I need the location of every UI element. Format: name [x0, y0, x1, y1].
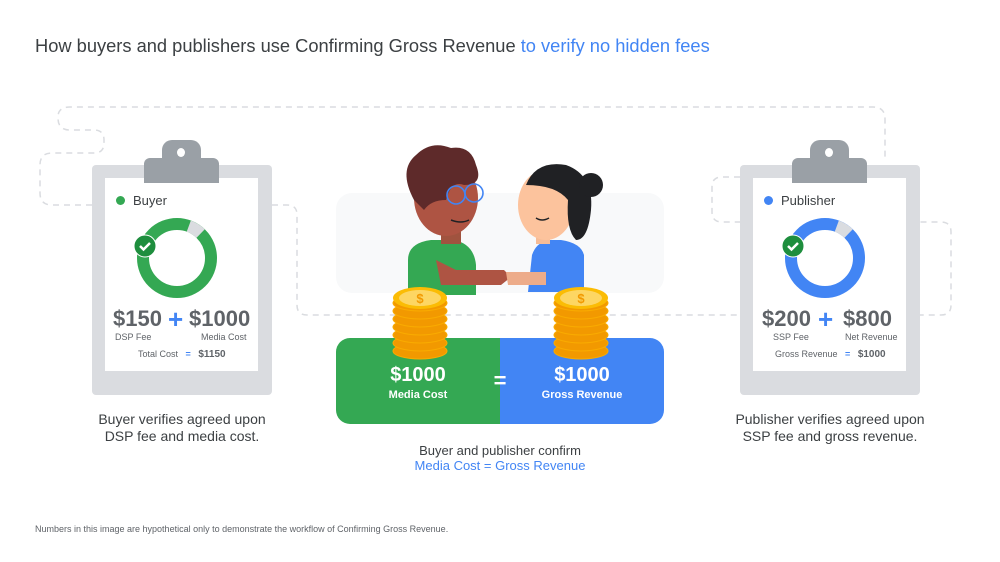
icon: coin stack left: $	[416, 291, 424, 306]
caption: center: Media Cost = Gross Revenue	[415, 458, 585, 473]
equation: DSP Fee	[115, 332, 151, 342]
donut chart	[785, 218, 865, 298]
icon: coin stack right	[554, 287, 608, 360]
caption: buyer	[98, 411, 266, 444]
equation: Net Revenue	[845, 332, 898, 342]
bar: media cost = gross revenue: Media Cost	[389, 389, 447, 401]
caption: publisher: SSP fee and gross revenue.	[743, 428, 917, 444]
bar: media cost = gross revenue: $1000	[390, 364, 446, 386]
equation: Total Cost = $1150	[138, 349, 226, 360]
caption: publisher	[735, 411, 925, 444]
caption: buyer: Buyer verifies agreed upon	[98, 411, 266, 427]
caption: buyer: DSP fee and media cost.	[105, 428, 259, 444]
donut chart	[137, 218, 217, 298]
bar: media cost = gross revenue: =	[494, 368, 506, 393]
caption: publisher: Publisher verifies agreed upon	[735, 411, 925, 427]
bar: media cost = gross revenue	[336, 338, 664, 424]
publisher person	[506, 164, 603, 292]
equation: Gross Revenue = $1000	[775, 349, 886, 360]
equation: +	[168, 304, 183, 334]
equation: $200	[762, 306, 811, 331]
footnote: Numbers in this image are hypothetical only to demonstrate the workflow of Confirming Gross Revenue.	[35, 524, 448, 534]
equation: $800	[843, 306, 892, 331]
illustration: handshake people	[406, 145, 603, 295]
icon: clip	[792, 140, 867, 183]
equation: +	[818, 304, 833, 334]
equation: Media Cost	[201, 332, 247, 342]
legend: buyer	[116, 193, 167, 208]
icon: coin stack right: $	[577, 291, 585, 306]
equation: $1000	[189, 306, 250, 331]
icon: clip	[144, 140, 219, 183]
icon: coin stack left	[392, 287, 448, 360]
legend: publisher: Publisher	[781, 193, 835, 208]
icon: check	[782, 234, 804, 258]
equation	[113, 304, 250, 360]
panel: publisher clipboard	[740, 140, 920, 395]
bar: media cost = gross revenue: $1000	[554, 364, 610, 386]
bar: media cost = gross revenue: Gross Revenue	[542, 389, 622, 401]
equation	[762, 304, 898, 360]
buyer person	[406, 145, 511, 295]
legend: buyer: Buyer	[133, 193, 167, 208]
caption: center: Buyer and publisher confirm	[419, 443, 581, 458]
icon: check	[134, 234, 156, 258]
equation: $150	[113, 306, 162, 331]
panel: buyer clipboard	[92, 140, 272, 395]
caption: center	[415, 443, 585, 473]
equation: SSP Fee	[773, 332, 809, 342]
title: How buyers and publishers use Confirming Gross Revenue to verify no hidden fees	[35, 35, 710, 56]
panel: center background	[336, 193, 664, 293]
